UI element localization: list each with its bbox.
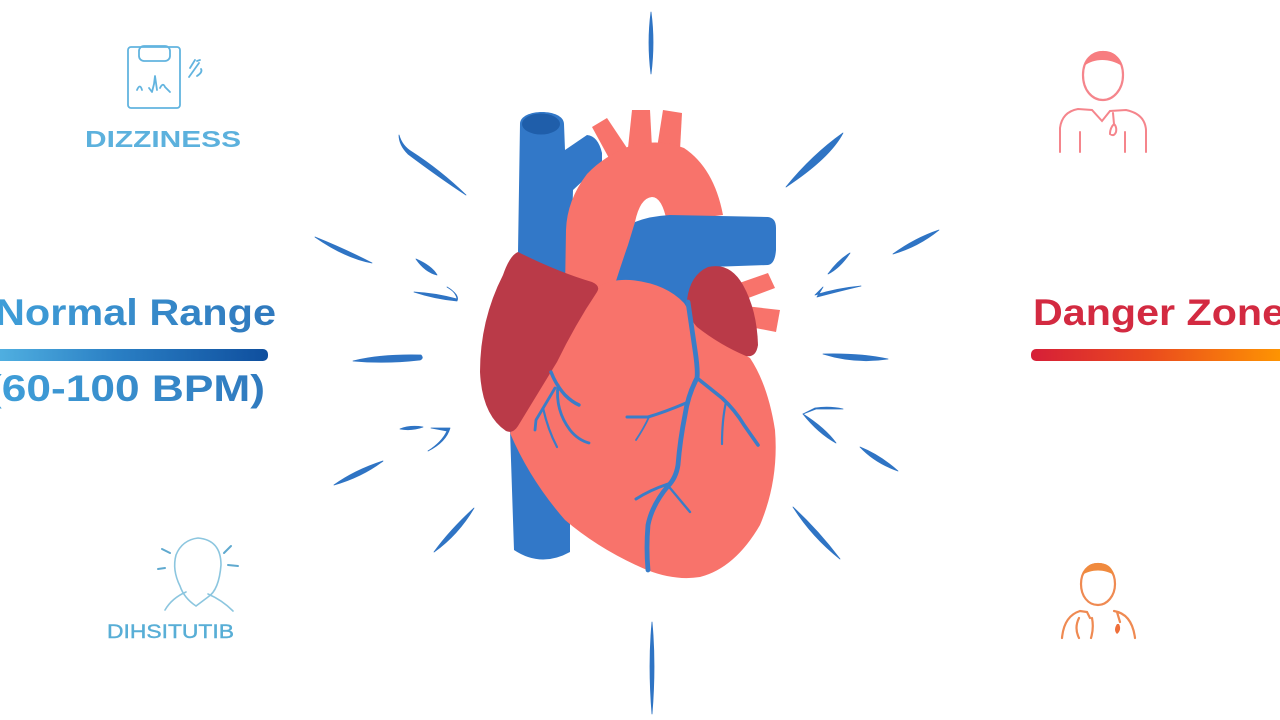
label: garbled symptom caption: DIHSITUTIB [107,622,234,643]
aorta arch and branches [565,110,780,332]
heading: danger zone: Danger Zone [1033,292,1280,333]
icon: clipboard [128,46,202,108]
gradient bar: danger [1031,349,1280,361]
coronary vessels [535,302,758,570]
normal range panel [0,292,276,409]
gradient bar: normal [0,349,268,361]
icon: person with stethoscope, pink [1060,51,1146,152]
radiating pulse lines [315,12,939,714]
heading: normal range: Normal Range [0,292,276,333]
pulmonary artery [616,215,776,310]
icon: head and shoulders [158,538,238,611]
right atrium [480,252,598,432]
label: dizziness: DIZZINESS [85,126,241,152]
symptom: head icon with label [107,538,238,643]
symptom: clipboard with dizziness marks [85,46,241,152]
superior and inferior vena cava [510,112,602,560]
heart body [510,280,776,578]
left atrium [687,266,758,356]
icon: person with stethoscope, orange [1062,563,1135,638]
danger zone panel [1031,292,1280,361]
heart illustration [480,110,780,578]
